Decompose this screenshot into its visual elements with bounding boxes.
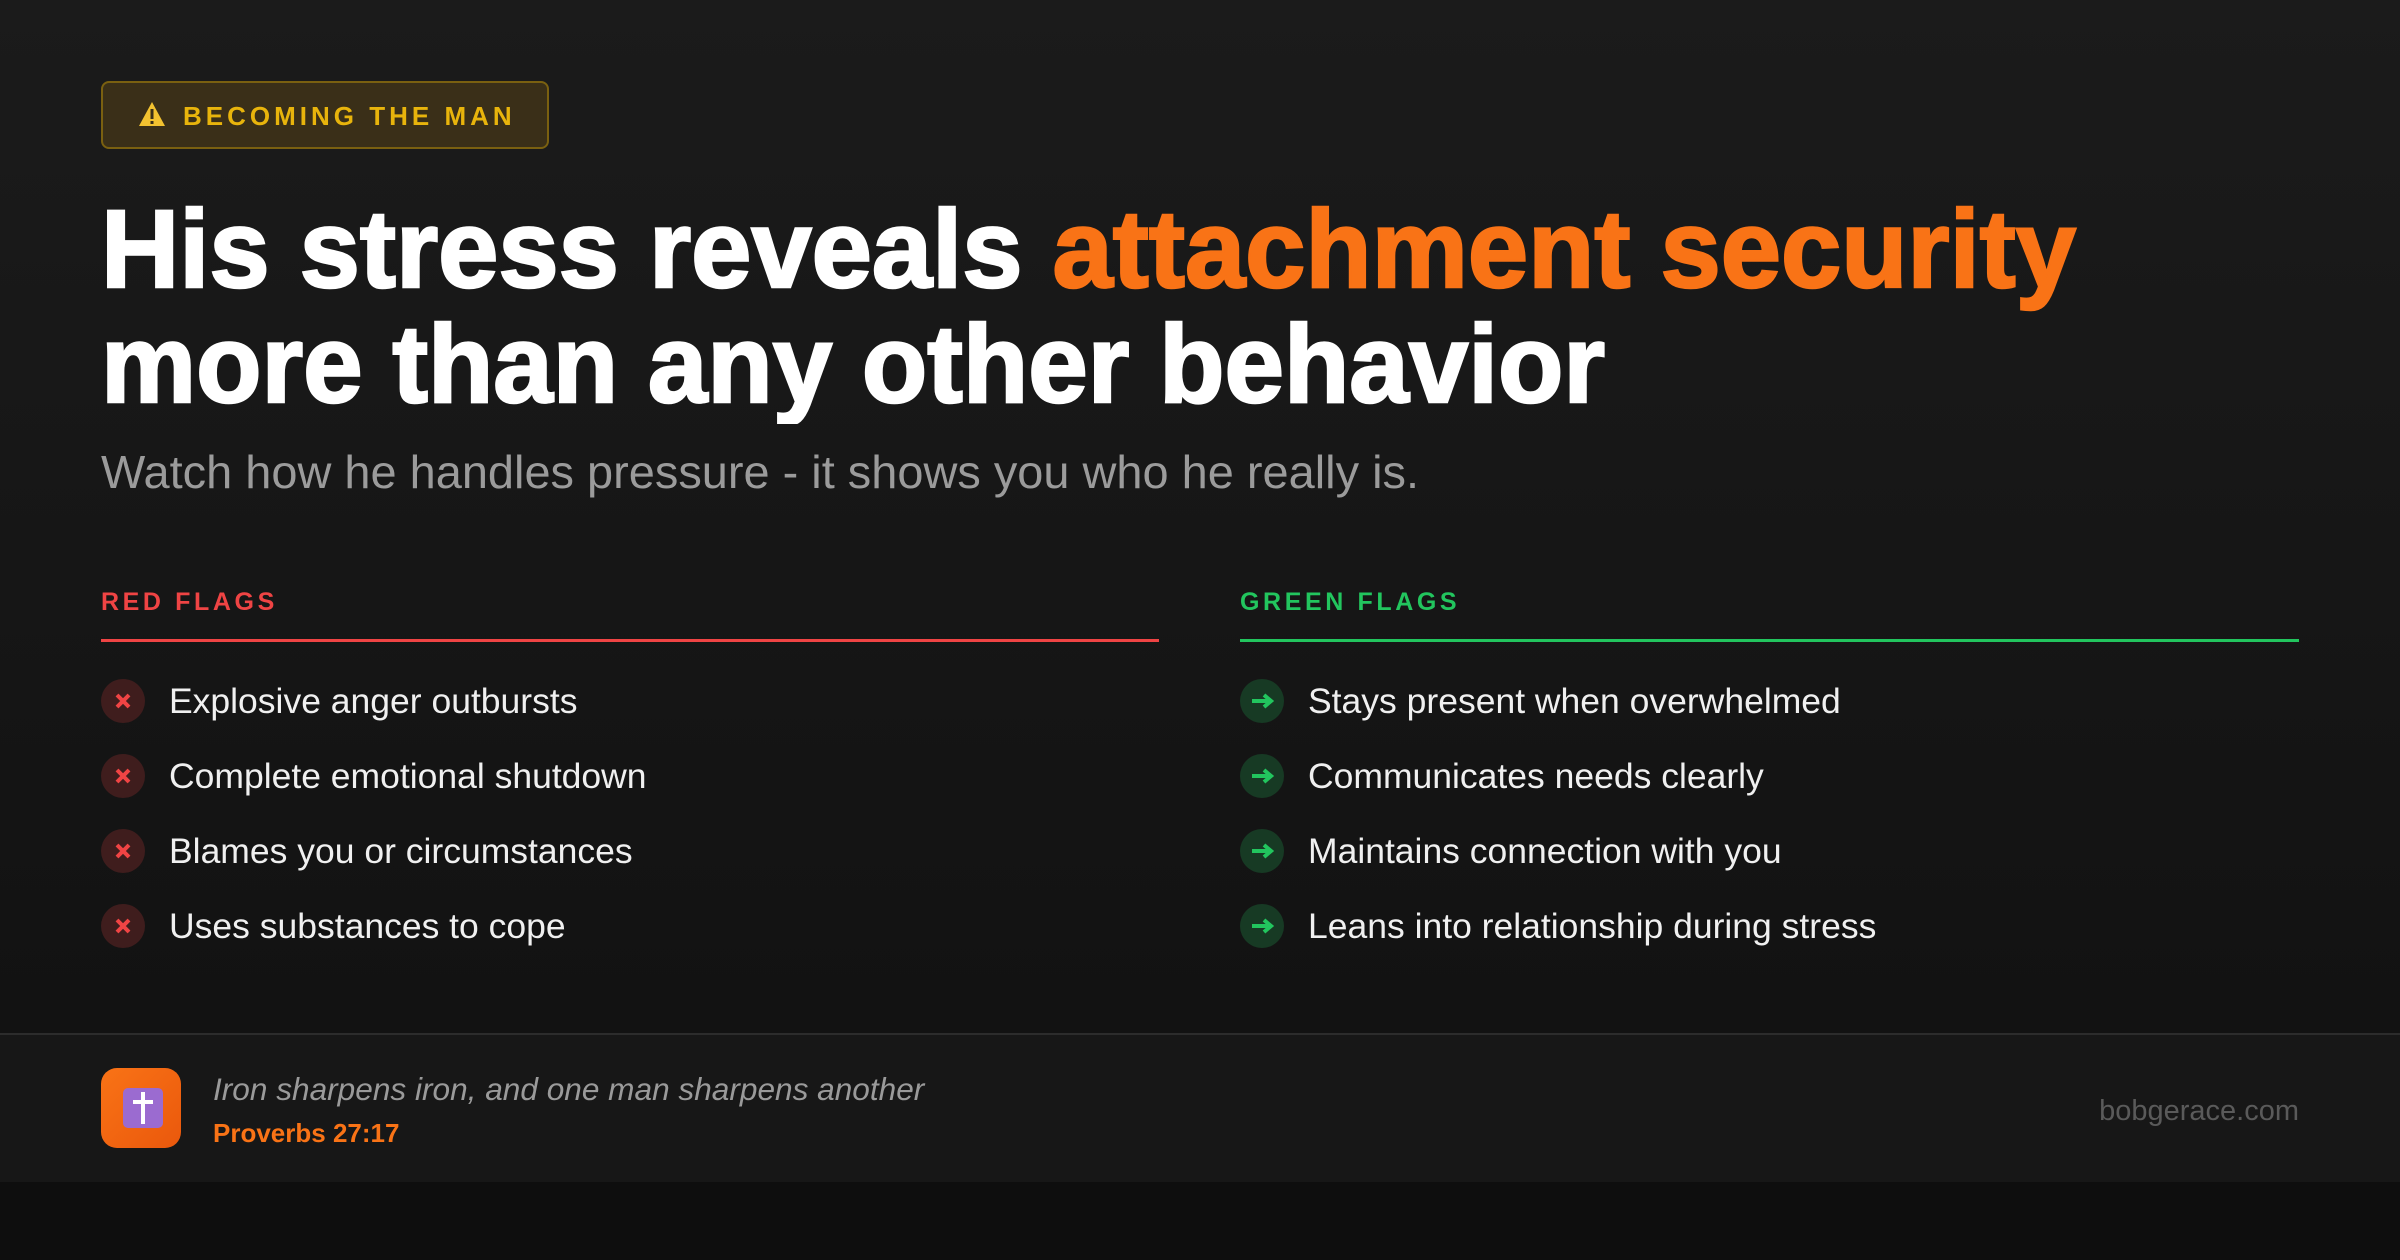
panel: green flags — [1240, 588, 2299, 948]
green flags heading: GREEN FLAGS — [1240, 588, 1460, 616]
website: bobgerace.com — [2099, 1095, 2299, 1127]
red item 4: Uses substances to cope — [169, 906, 566, 946]
quote: Iron sharpens iron, and one man sharpens another — [213, 1071, 924, 1107]
icon: warning — [139, 102, 165, 126]
title: His stress reveals attachment security — [101, 188, 2076, 311]
green item 2: Communicates needs clearly — [1308, 756, 1764, 796]
subtitle: Watch how he handles pressure - it shows you who he really is. — [101, 446, 1419, 498]
icon: cross — [101, 1068, 181, 1148]
title — [101, 188, 2078, 424]
red item 2: Complete emotional shutdown — [169, 756, 647, 796]
panel: red flags — [101, 588, 1159, 948]
red item 1: Explosive anger outbursts — [169, 680, 577, 720]
footer — [0, 1033, 2400, 1182]
badge — [101, 81, 549, 149]
title: more than any other behavior — [101, 303, 1605, 424]
red item 3: Blames you or circumstances — [169, 830, 633, 870]
badge text: BECOMING THE MAN — [183, 101, 516, 131]
red flags heading: RED FLAGS — [101, 588, 278, 616]
green item 4: Leans into relationship during stress — [1308, 906, 1876, 946]
green item 3: Maintains connection with you — [1308, 830, 1782, 870]
green item 1: Stays present when overwhelmed — [1308, 680, 1841, 720]
citation: Proverbs 27:17 — [213, 1118, 399, 1148]
